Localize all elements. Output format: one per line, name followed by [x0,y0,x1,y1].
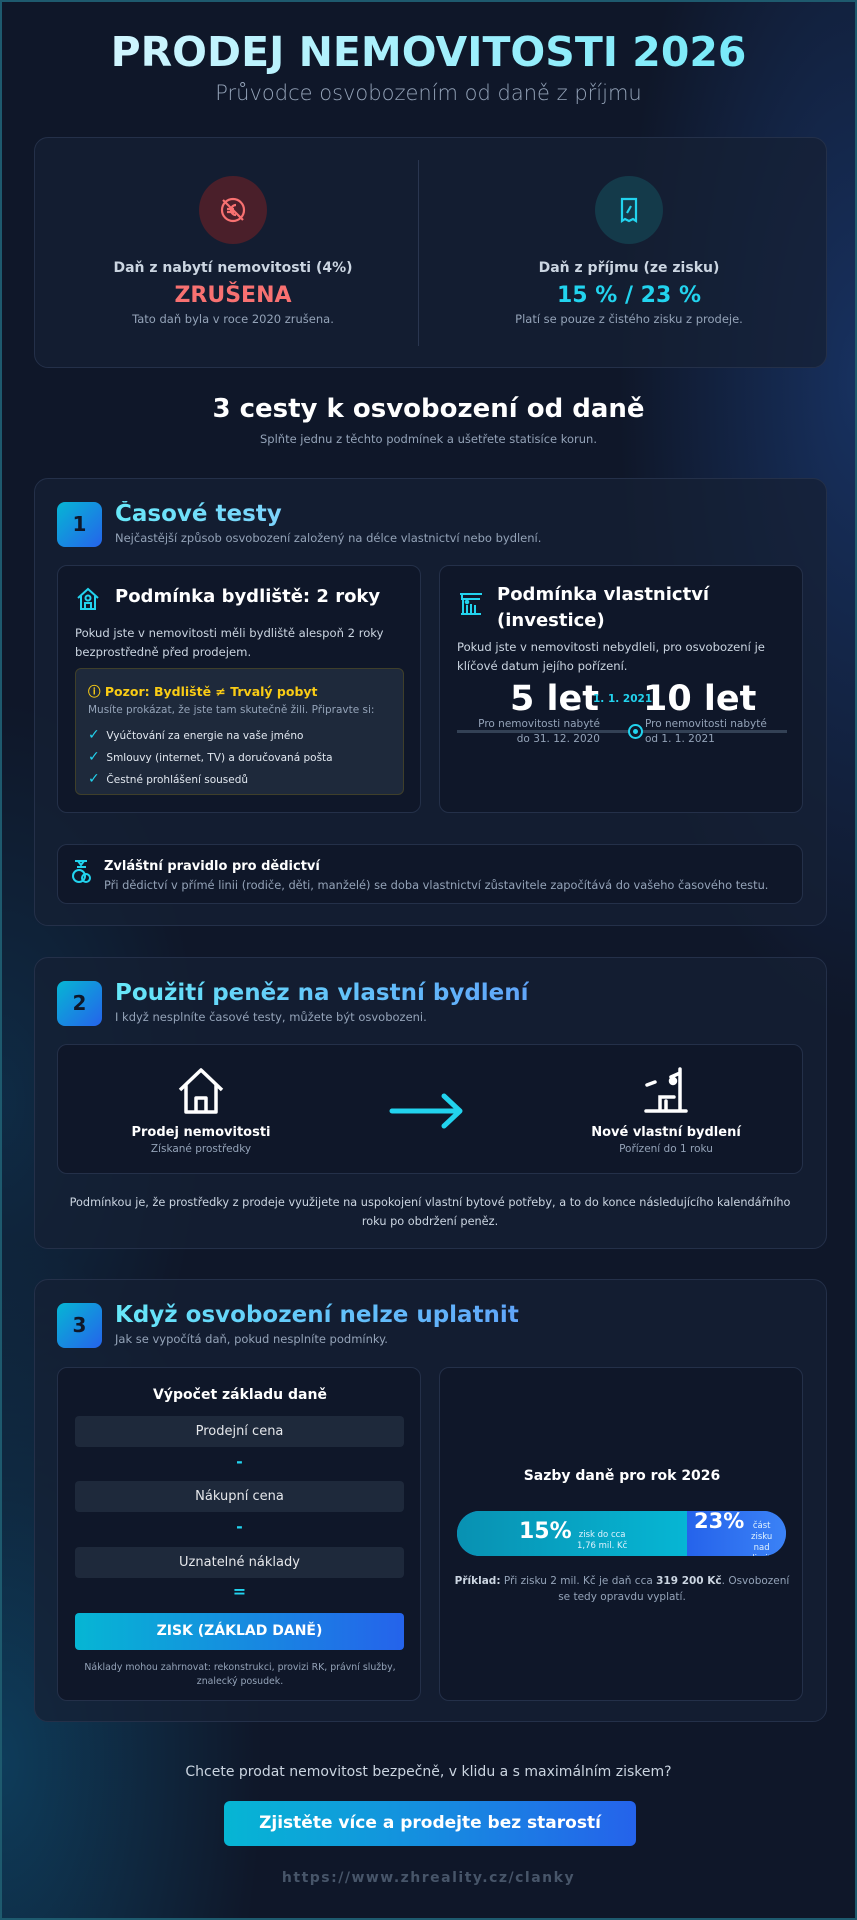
timeline: 5 let [510,679,599,719]
badge 3 [57,1303,102,1348]
inheritance title: Zvláštní pravidlo pro dědictví [104,859,320,874]
warning box [75,668,404,795]
subheading: Splňte jednu z těchto podmínek a ušetřete statisíce korun. [260,432,597,446]
card heading: (investice) [497,610,605,631]
box: sale price: Prodejní cena [196,1424,283,1439]
value: 15 % / 23 % [557,283,701,308]
card: calculation: = [233,1582,246,1601]
timeline: od 1. 1. 2021 [645,733,715,745]
rate bar: zisku [751,1532,772,1542]
URL: https://www.zhreality.cz/clanky [282,1870,575,1886]
card: calculation: - [236,1517,243,1536]
flow box [57,1044,803,1174]
value: ZRUŠENA [174,283,292,308]
timeline: Pro nemovitosti nabyté [478,718,600,730]
section subtitle: I když nesplníte časové testy, můžete být osvobozeni. [115,1010,427,1024]
timeline [457,679,787,745]
card: calculation: - [236,1452,243,1471]
label: Daň z nabytí nemovitosti (4%) [113,260,353,276]
panel: section 1 [34,478,827,926]
box: sale price [75,1416,404,1447]
calc title: Výpočet základu daně [153,1387,327,1403]
timeline: 10 let [643,679,756,719]
card: rates [439,1367,803,1701]
subtitle: Průvodce osvobozením od daně z příjmu [215,81,642,105]
heading: 3 ways: 3 cesty k osvobození od daně [212,394,645,424]
result box: ZISK (ZÁKLAD DANĚ) [157,1623,322,1639]
box: purchase price [75,1481,404,1512]
warning text: Musíte prokázat, že jste tam skutečně žili. Připravte si: [88,704,374,716]
step: new home: Pořízení do 1 roku [619,1143,713,1155]
card: residence [57,565,421,813]
condition text: Podmínkou je, že prostředky z prodeje využijete na uspokojení vlastní bytové potřeby, a to do konce následujícího kalendářního roku po obdržení peněz. [70,1196,790,1228]
panel: overview [34,137,827,368]
card: calculation [57,1367,421,1701]
checklist: ✓ Čestné prohlášení sousedů [88,771,248,787]
inheritance text: Při dědictví v přímé linii (rodiče, děti, manželé) se doba vlastnictví zůstavitele započítává do vašeho časového testu. [104,878,768,892]
icon: new home [644,1067,688,1113]
badge 2 [57,981,102,1026]
title [2,26,855,78]
CTA button [224,1801,636,1846]
CTA text: Chcete prodat nemovitost bezpečně, v klidu a s maximálním ziskem? [185,1764,672,1780]
CTA button: Zjistěte více a prodejte bez starostí [259,1813,601,1833]
rate bar: nad [754,1543,770,1553]
box: costs: Uznatelné náklady [179,1555,300,1570]
section subtitle: Jak se vypočítá daň, pokud nesplníte podmínky. [115,1332,388,1346]
title: PRODEJ NEMOVITOSTI 2026 [111,28,746,76]
card: inheritance [57,844,803,904]
rate bar: zisk do cca [579,1530,626,1540]
step: sale [131,1068,270,1155]
label: Daň z příjmu (ze zisku) [539,260,719,276]
rate bar: část [753,1521,770,1531]
arrow [390,1094,462,1128]
note: Tato daň byla v roce 2020 zrušena. [132,312,334,326]
right item [515,176,743,326]
card heading: Podmínka bydliště: 2 roky [115,586,380,607]
badge 1 [57,502,102,547]
rates title: Sazby daně pro rok 2026 [524,1468,720,1484]
badge 2: 2 [73,991,86,1015]
card: ownership [439,565,803,813]
icon: house person [77,588,99,610]
rate bar [457,1511,786,1556]
rate bar: 15% [519,1519,572,1544]
panel: section 3 [34,1279,827,1722]
left item [113,176,353,326]
badge 3: 3 [73,1313,86,1337]
warning title: ⓘ Pozor: Bydliště ≠ Trvalý pobyt [88,684,318,699]
card heading: Podmínka vlastnictví [497,584,709,605]
timeline: Pro nemovitosti nabyté [645,718,767,730]
result box [75,1613,404,1650]
section title: Časové testy [115,501,282,527]
note: Náklady mohou zahrnovat: rekonstrukci, provizi RK, právní služby, znalecký posudek. [84,1662,396,1687]
section title: Když osvobození nelze uplatnit [115,1302,519,1328]
badge 1: 1 [73,512,86,536]
card body: Pokud jste v nemovitosti měli bydliště alespoň 2 roky bezprostředně před prodejem. [75,626,383,659]
box: costs [75,1547,404,1578]
icon: crossed coin [199,176,267,244]
icon: inheritance [72,860,91,883]
example text: Příklad: Při zisku 2 mil. Kč je daň cca 319 200 Kč. Osvobození se tedy opravdu vyplatí. [455,1575,789,1603]
timeline: do 31. 12. 2020 [517,733,600,745]
step: new home: Nové vlastní bydlení [591,1125,741,1140]
box: purchase price: Nákupní cena [195,1489,284,1504]
section subtitle: Nejčastější způsob osvobození založený na délce vlastnictví nebo bydlení. [115,531,541,545]
step: sale: Získané prostředky [151,1143,251,1155]
rate bar: 1,76 mil. Kč [577,1541,627,1551]
checklist: ✓ Vyúčtování za energie na vaše jméno [88,727,303,743]
section title: Použití peněz na vlastní bydlení [115,980,529,1006]
note: Platí se pouze z čistého zisku z prodeje. [515,312,743,326]
icon: receipt [595,176,663,244]
checklist [88,727,333,787]
timeline: 1. 1. 2021 [593,693,652,705]
step: sale: Prodej nemovitosti [131,1125,270,1140]
panel: section 2 [34,957,827,1249]
card heading [497,584,710,631]
card body: Pokud jste v nemovitosti nebydleli, pro osvobození je klíčové datum jejího pořízení. [457,640,765,673]
step: new home [591,1067,742,1155]
icon: building [460,593,482,615]
checklist: ✓ Smlouvy (internet, TV) a doručovaná pošta [88,749,333,765]
icon: house [178,1068,224,1114]
